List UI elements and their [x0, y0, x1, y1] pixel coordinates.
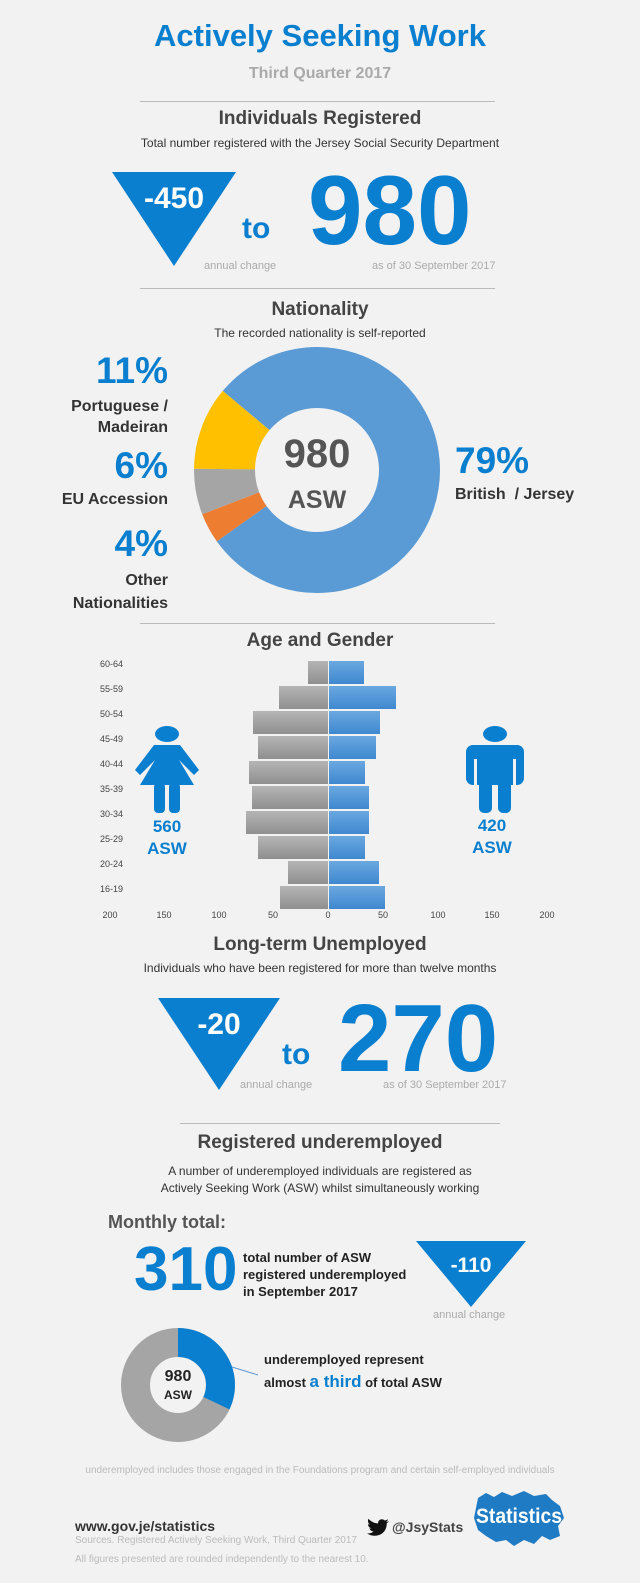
- icon: twitter: [367, 1518, 389, 1536]
- chart: age pyramid: 150: [484, 910, 500, 920]
- text: 310 description: [243, 1250, 406, 1299]
- number: 980: 980: [308, 155, 472, 265]
- chart: age pyramid: 200: [102, 910, 118, 920]
- icon: man: [466, 726, 524, 813]
- logo: statistics: [474, 1491, 564, 1546]
- chart: age pyramid: 16-19: [100, 884, 123, 894]
- chart: age pyramid: 100: [211, 910, 227, 920]
- logo: statistics: Statistics: [476, 1505, 562, 1528]
- text: a third callout: [264, 1352, 442, 1391]
- text: a third callout: underemployed represent: [264, 1352, 424, 1367]
- icon: down triangle -20: -20: [197, 1008, 241, 1041]
- text: 310 description: total number of ASW: [243, 1250, 371, 1265]
- number: 270: 270: [338, 985, 498, 1092]
- stat: 11% portuguese: [71, 350, 168, 436]
- label: as of date: as of 30 September 2017: [372, 260, 496, 272]
- stat: 11% portuguese: Madeiran: [98, 419, 168, 436]
- heading: nationality: Nationality: [271, 299, 369, 320]
- text: to: to: [282, 1038, 310, 1071]
- stat: male 420 ASW: ASW: [472, 838, 512, 857]
- chart: age pyramid: 30-34: [100, 809, 123, 819]
- stat: female 560 ASW: ASW: [147, 839, 187, 858]
- title: Actively Seeking Work: [154, 18, 486, 53]
- stat: 11% portuguese: Portuguese /: [71, 398, 168, 415]
- chart: age pyramid: 45-49: [100, 734, 123, 744]
- chart: age pyramid: 50: [268, 910, 278, 920]
- subtitle: Third Quarter 2017: [249, 65, 391, 82]
- icon: down triangle -450: -450: [144, 182, 204, 215]
- chart: nationality donut: [194, 347, 440, 593]
- chart: age pyramid: 60-64: [100, 659, 123, 669]
- stat: 6% EU accession: 6%: [115, 445, 168, 486]
- footer: website and sources: All figures presented are rounded independently to the nearest 10.: [75, 1554, 369, 1565]
- icon: down triangle -110: [416, 1241, 526, 1307]
- chart: age pyramid: 150: [156, 910, 172, 920]
- chart: small donut: [121, 1328, 258, 1442]
- stat: 4% other: 4%: [115, 523, 168, 564]
- text: long-term description: Individuals who have been registered for more than twelve months: [144, 961, 496, 975]
- text: 310 description: registered underemployed: [243, 1267, 406, 1282]
- stat: female 560 ASW: [147, 817, 187, 858]
- chart: small donut: 980: [165, 1368, 191, 1385]
- chart: age pyramid: 25-29: [100, 834, 123, 844]
- footer: website and sources: www.gov.je/statistics: [75, 1518, 215, 1534]
- chart: age pyramid: 100: [430, 910, 446, 920]
- footer: website and sources: Sources. Registered Actively Seeking Work, Third Quarter 2017: [75, 1535, 357, 1546]
- icon: down triangle -110: -110: [451, 1254, 491, 1277]
- stat: 4% other: Other: [125, 572, 168, 589]
- label: annual change: annual change: [433, 1309, 505, 1321]
- stat: 4% other: [73, 523, 168, 612]
- chart: age pyramid: 200: [539, 910, 555, 920]
- heading: registered underemployed: Registered underemployed: [198, 1132, 442, 1153]
- chart: age pyramid: 20-24: [100, 859, 123, 869]
- stat: female 560 ASW: 560: [153, 817, 181, 836]
- heading: monthly total: Monthly total:: [108, 1212, 226, 1232]
- text: underemployed description: A number of underemployed individuals are registered as: [168, 1164, 472, 1178]
- label: annual change: annual change: [204, 260, 276, 272]
- stat: 79% british: 79%: [455, 440, 529, 481]
- text: twitter handle: @JsyStats: [392, 1519, 463, 1535]
- chart: nationality donut: ASW: [288, 486, 347, 514]
- label: as of date: as of 30 September 2017: [383, 1079, 507, 1091]
- number: 310: 310: [134, 1235, 237, 1304]
- stat: 11% portuguese: 11%: [96, 350, 168, 391]
- text: nationality note: The recorded nationality is self-reported: [214, 326, 426, 340]
- stat: 4% other: Nationalities: [73, 595, 168, 612]
- heading: individuals registered: Individuals Registered: [219, 108, 421, 129]
- stat: 79% british: British / Jersey: [455, 486, 574, 503]
- label: annual change: annual change: [240, 1079, 312, 1091]
- stat: 6% EU accession: EU Accession: [62, 491, 168, 508]
- text: registered description: Total number registered with the Jersey Social Security Department: [141, 136, 499, 150]
- text: 310 description: in September 2017: [243, 1284, 358, 1299]
- icon: down triangle -450: [112, 172, 236, 266]
- stat: male 420 ASW: [472, 816, 512, 857]
- footer: website and sources: [75, 1518, 369, 1565]
- chart: nationality donut: 980: [284, 432, 350, 476]
- icon: down triangle -20: [158, 998, 280, 1090]
- heading: age and gender: Age and Gender: [247, 630, 393, 651]
- footnote: underemployed includes those engaged in the Foundations program and certain self-employed individuals: [85, 1465, 555, 1476]
- icon: woman: [135, 726, 199, 813]
- stat: 79% british: [455, 440, 574, 503]
- text: underemployed description: Actively Seeking Work (ASW) whilst simultaneously working: [161, 1181, 479, 1195]
- stat: male 420 ASW: 420: [478, 816, 506, 835]
- text: underemployed description: [160, 1164, 479, 1195]
- chart: age pyramid: 50: [378, 910, 388, 920]
- chart: age pyramid: [100, 659, 555, 920]
- chart: age pyramid: 35-39: [100, 784, 123, 794]
- text: to: to: [242, 212, 270, 245]
- chart: age pyramid: 0: [325, 910, 331, 920]
- chart: age pyramid: 50-54: [100, 709, 123, 719]
- chart: small donut: ASW: [164, 1388, 193, 1402]
- chart: age pyramid: 40-44: [100, 759, 123, 769]
- text: a third callout: almost a third of total ASW: [264, 1372, 442, 1391]
- chart: age pyramid: 55-59: [100, 684, 123, 694]
- stat: 6% EU accession: [62, 445, 168, 508]
- heading: long-term unemployed: Long-term Unemployed: [213, 934, 427, 955]
